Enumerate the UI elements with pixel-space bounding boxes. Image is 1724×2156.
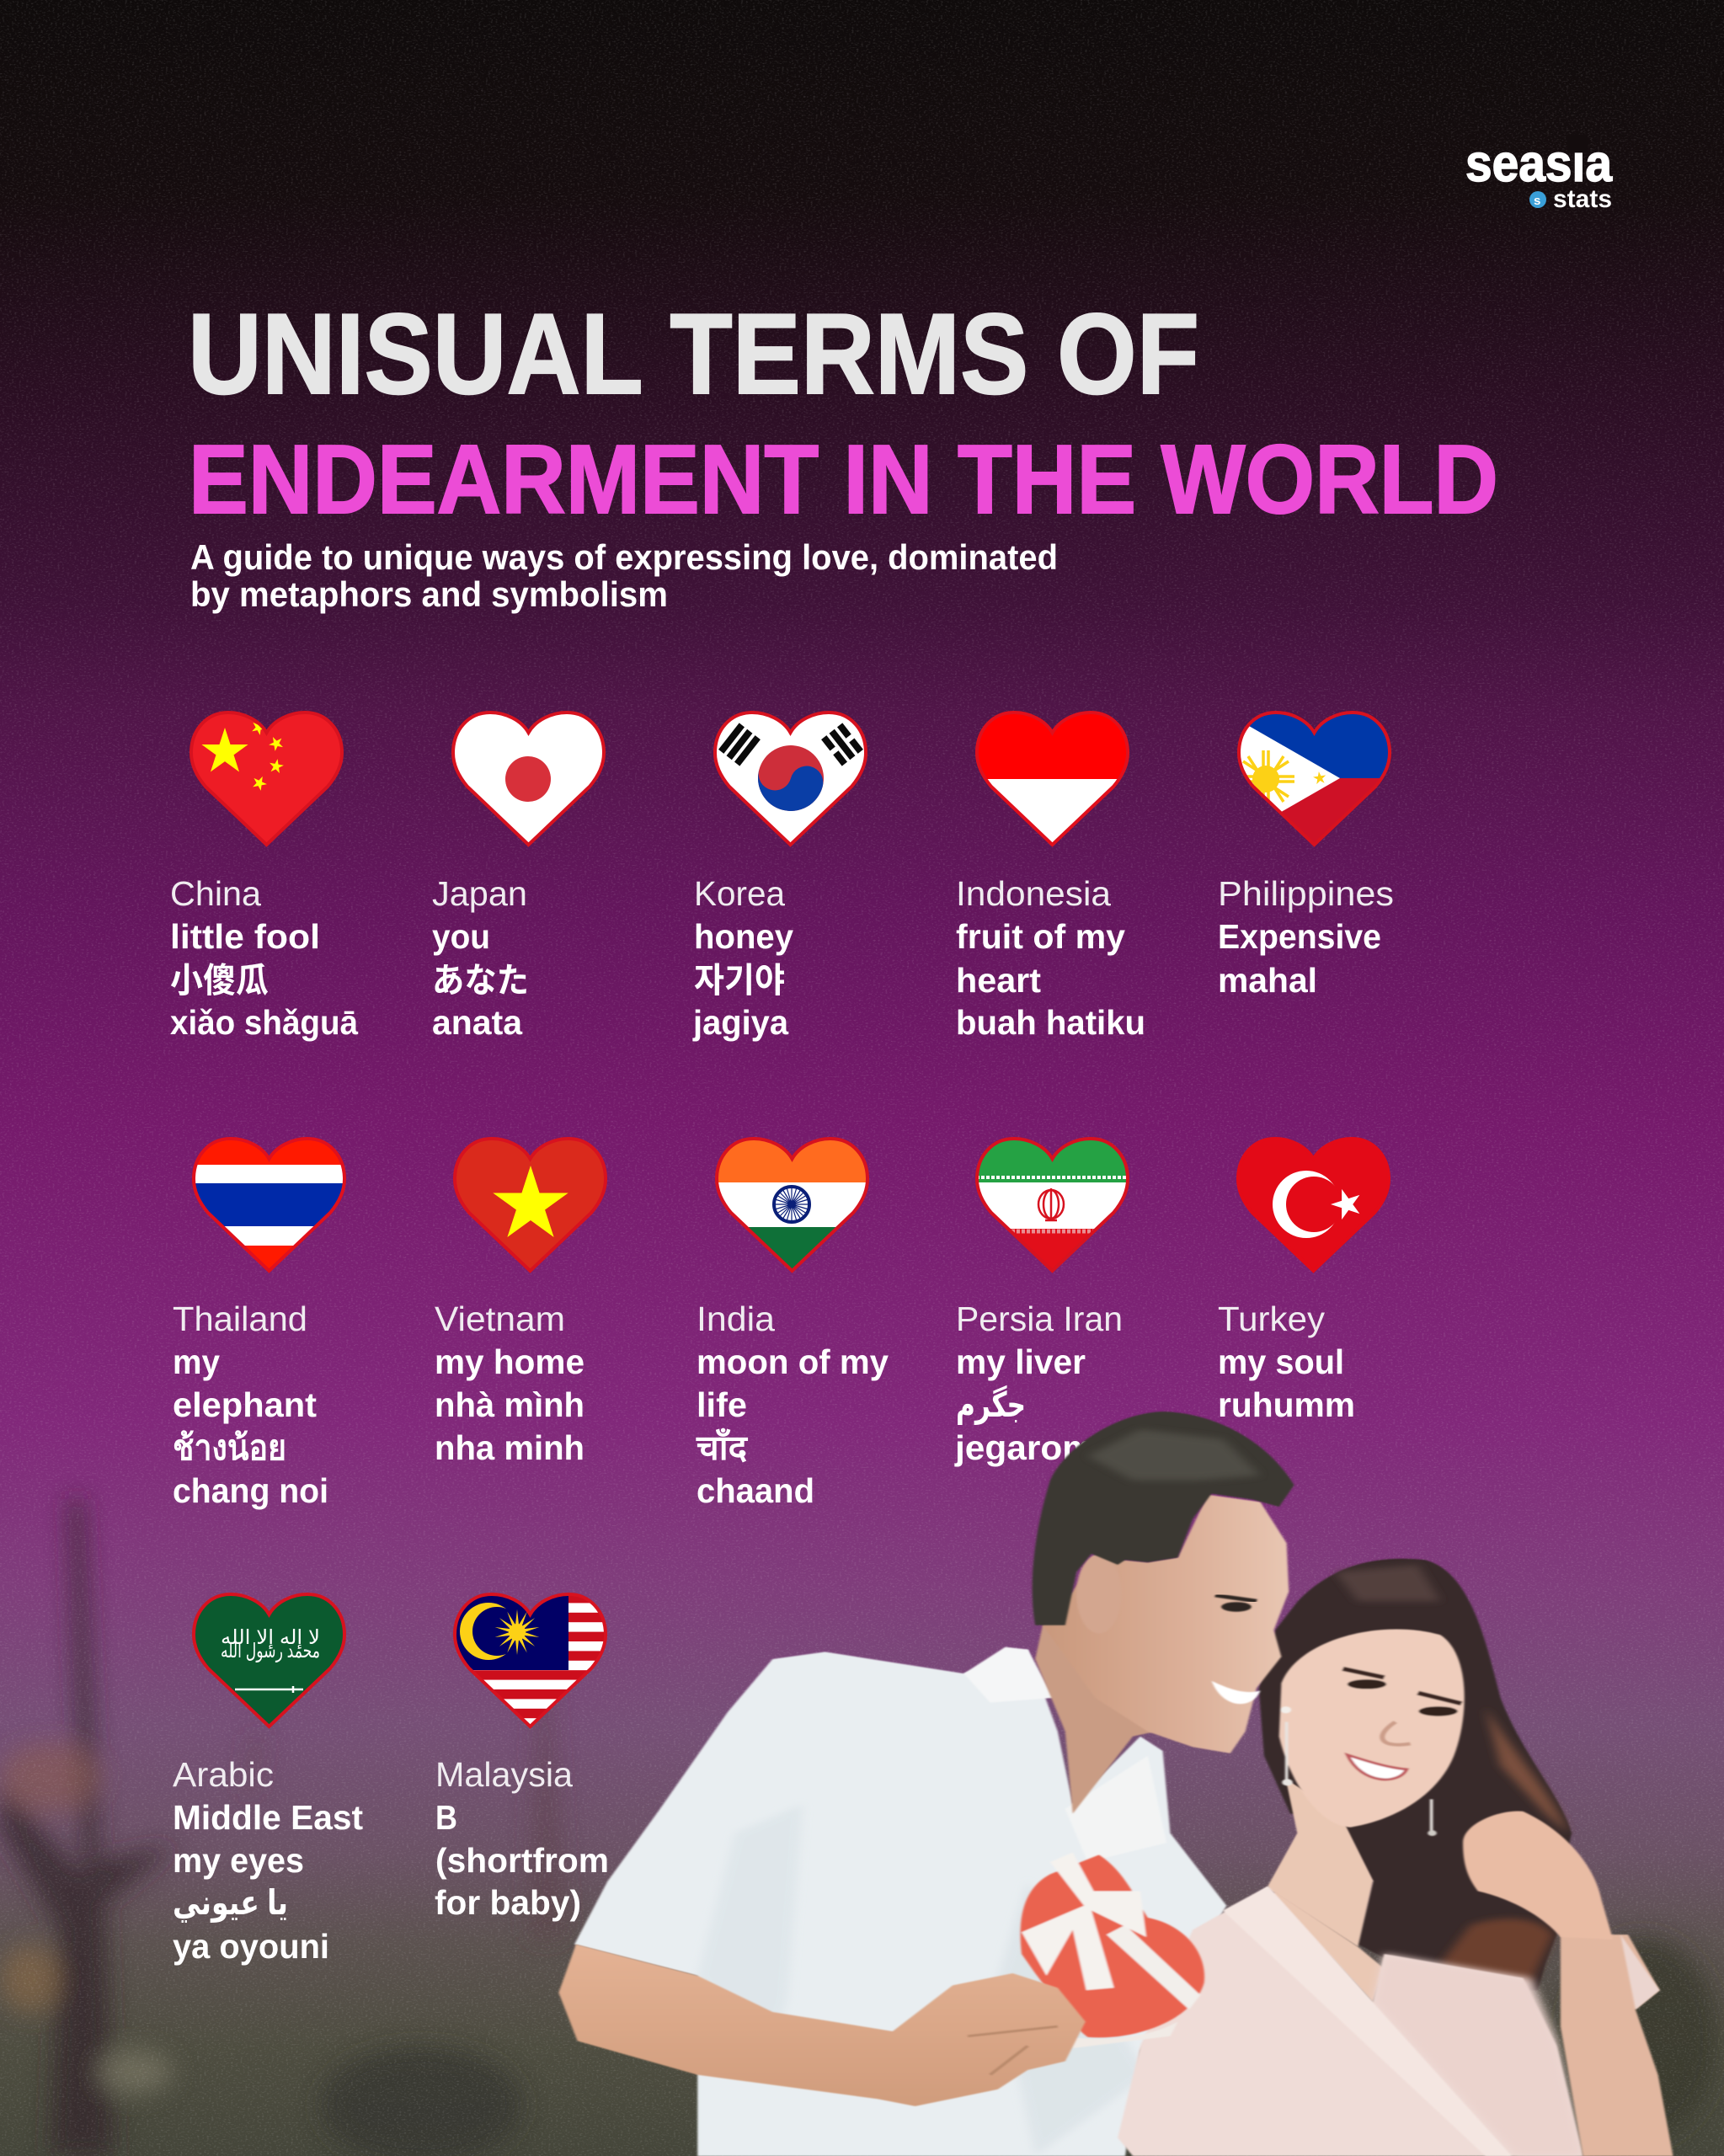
- text: Vietnam: [435, 1299, 584, 1467]
- text: Arabic: يا عيوني: [173, 1883, 288, 1923]
- text: Philippines: Philippines: [1218, 874, 1394, 913]
- text: Turkey: my soul: [1218, 1342, 1344, 1381]
- text: Philippines: mahal: [1218, 961, 1317, 1000]
- photo: couple with heart gift: [558, 1412, 1673, 2156]
- text: Japan: あなた: [432, 952, 529, 1002]
- text: Persia Iran: جگرم: [956, 1385, 1026, 1426]
- icon: Japan flag heart: [452, 712, 605, 846]
- text: Korea: [692, 874, 793, 1042]
- text: Philippines: [1218, 874, 1394, 1000]
- icon: Korea flag heart: [714, 712, 867, 846]
- text: Malaysia: for baby): [435, 1883, 581, 1922]
- text: Vietnam: nhà mình: [435, 1385, 584, 1424]
- text: China: xiǎo shǎguā: [170, 1003, 359, 1042]
- subtitle: by metaphors and symbolism: [190, 574, 668, 614]
- text: China: 小傻瓜: [170, 952, 269, 1002]
- text: Thailand: [173, 1299, 328, 1510]
- text: Malaysia: Malaysia: [435, 1755, 573, 1794]
- text: Indonesia: fruit of my: [956, 917, 1125, 956]
- woman: hair back: [1259, 1559, 1572, 1993]
- title: ENDEARMENT IN THE WORLD: [189, 424, 1498, 534]
- text: Malaysia: (shortfrom: [435, 1841, 609, 1880]
- text: Indonesia: buah hatiku: [956, 1003, 1145, 1042]
- text: Korea: Korea: [694, 874, 785, 913]
- text: Turkey: ruhumm: [1218, 1385, 1355, 1424]
- text: Turkey: Turkey: [1218, 1299, 1326, 1338]
- text: Indonesia: [956, 874, 1145, 1042]
- text: Turkey: [1218, 1299, 1355, 1424]
- text: Thailand: chang noi: [173, 1471, 328, 1510]
- icon: Indonesia flag heart: [976, 712, 1129, 846]
- text: Indonesia: heart: [956, 961, 1041, 1000]
- text: Malaysia: B: [435, 1798, 457, 1837]
- text: India: चाँद: [696, 1428, 748, 1467]
- text: Indonesia: Indonesia: [956, 874, 1111, 913]
- text: India: moon of my: [697, 1342, 889, 1381]
- logo: seasia stats: [1465, 135, 1612, 213]
- icon: India flag heart: [716, 1138, 868, 1273]
- text: Vietnam: Vietnam: [435, 1299, 565, 1338]
- icon: blue s badge: s: [1534, 194, 1540, 208]
- logo: seasia stats: stats: [1553, 185, 1612, 213]
- text: Korea: 자기야: [694, 952, 785, 1002]
- text: Japan: anata: [432, 1003, 523, 1042]
- text: Thailand: elephant: [173, 1385, 317, 1424]
- icon: Vietnam flag heart: [454, 1138, 606, 1273]
- icon: China flag heart: [190, 712, 343, 846]
- text: Thailand: my: [173, 1342, 220, 1381]
- text: Persia Iran: [954, 1299, 1123, 1467]
- text: Philippines: Expensive: [1218, 917, 1381, 956]
- icon: Malaysia flag heart: [454, 1593, 606, 1728]
- woman: face: [1279, 1629, 1465, 1836]
- title: UNISUAL TERMS OF: [188, 290, 1199, 418]
- icon: Saudi Arabia flag heart: محمد رسول الله: [221, 1640, 320, 1662]
- text: Vietnam: nha minh: [435, 1428, 584, 1467]
- gift: red heart box with bow: [1021, 1853, 1204, 2048]
- woman: hair lowlights: [1336, 1565, 1568, 1988]
- text: China: little fool: [170, 917, 320, 956]
- text: Japan: Japan: [432, 874, 527, 913]
- text: Thailand: Thailand: [173, 1299, 307, 1338]
- text: Korea: honey: [694, 917, 793, 956]
- text: India: life: [697, 1385, 747, 1424]
- background blurred trees: [0, 1499, 1718, 2156]
- icon: Iran flag heart: [976, 1138, 1129, 1273]
- icon: Philippines flag heart: [1221, 710, 1390, 846]
- subtitle: A guide to unique ways of expressing love, dominated: [190, 537, 1058, 577]
- text: India: India: [697, 1299, 775, 1338]
- text: India: chaand: [697, 1471, 814, 1510]
- icon: blue s badge: [1529, 191, 1546, 208]
- woman: raised hand: [1463, 1811, 1613, 1940]
- text: China: China: [170, 874, 261, 913]
- text: Arabic: my eyes: [173, 1841, 304, 1880]
- woman: body and dress: [1118, 1780, 1673, 2156]
- icon: Turkey flag heart: [1237, 1138, 1390, 1273]
- icon: Saudi Arabia flag heart: لا إله إلا الله: [221, 1626, 320, 1650]
- man: head and hair: [1033, 1412, 1294, 1753]
- text: Arabic: Middle East: [173, 1798, 363, 1837]
- text: Persia Iran: jegarom: [954, 1428, 1094, 1467]
- text: Vietnam: my home: [435, 1342, 584, 1381]
- text: Arabic: Arabic: [173, 1755, 274, 1794]
- text: Arabic: ya oyouni: [173, 1927, 329, 1966]
- text: China: [170, 874, 359, 1042]
- icon: Saudi Arabia flag heart: [193, 1593, 345, 1728]
- subtitle: [190, 537, 1058, 614]
- text: Persia Iran: Persia Iran: [956, 1299, 1123, 1338]
- text: Korea: jagiya: [692, 1003, 789, 1042]
- text: Thailand: ช้างน้อย: [173, 1428, 286, 1467]
- man: shirt: [574, 1625, 1226, 2156]
- text: Japan: [432, 874, 529, 1042]
- man: forearm and hand: [558, 1945, 1086, 2106]
- text: Malaysia: [435, 1755, 609, 1922]
- icon: Thailand flag heart: [193, 1138, 345, 1273]
- text: Persia Iran: my liver: [956, 1342, 1086, 1381]
- title: [188, 290, 1498, 534]
- text: Arabic: [173, 1755, 363, 1966]
- text: Japan: you: [432, 917, 490, 956]
- logo: seasia stats: seasia: [1465, 135, 1612, 193]
- text: India: [696, 1299, 889, 1510]
